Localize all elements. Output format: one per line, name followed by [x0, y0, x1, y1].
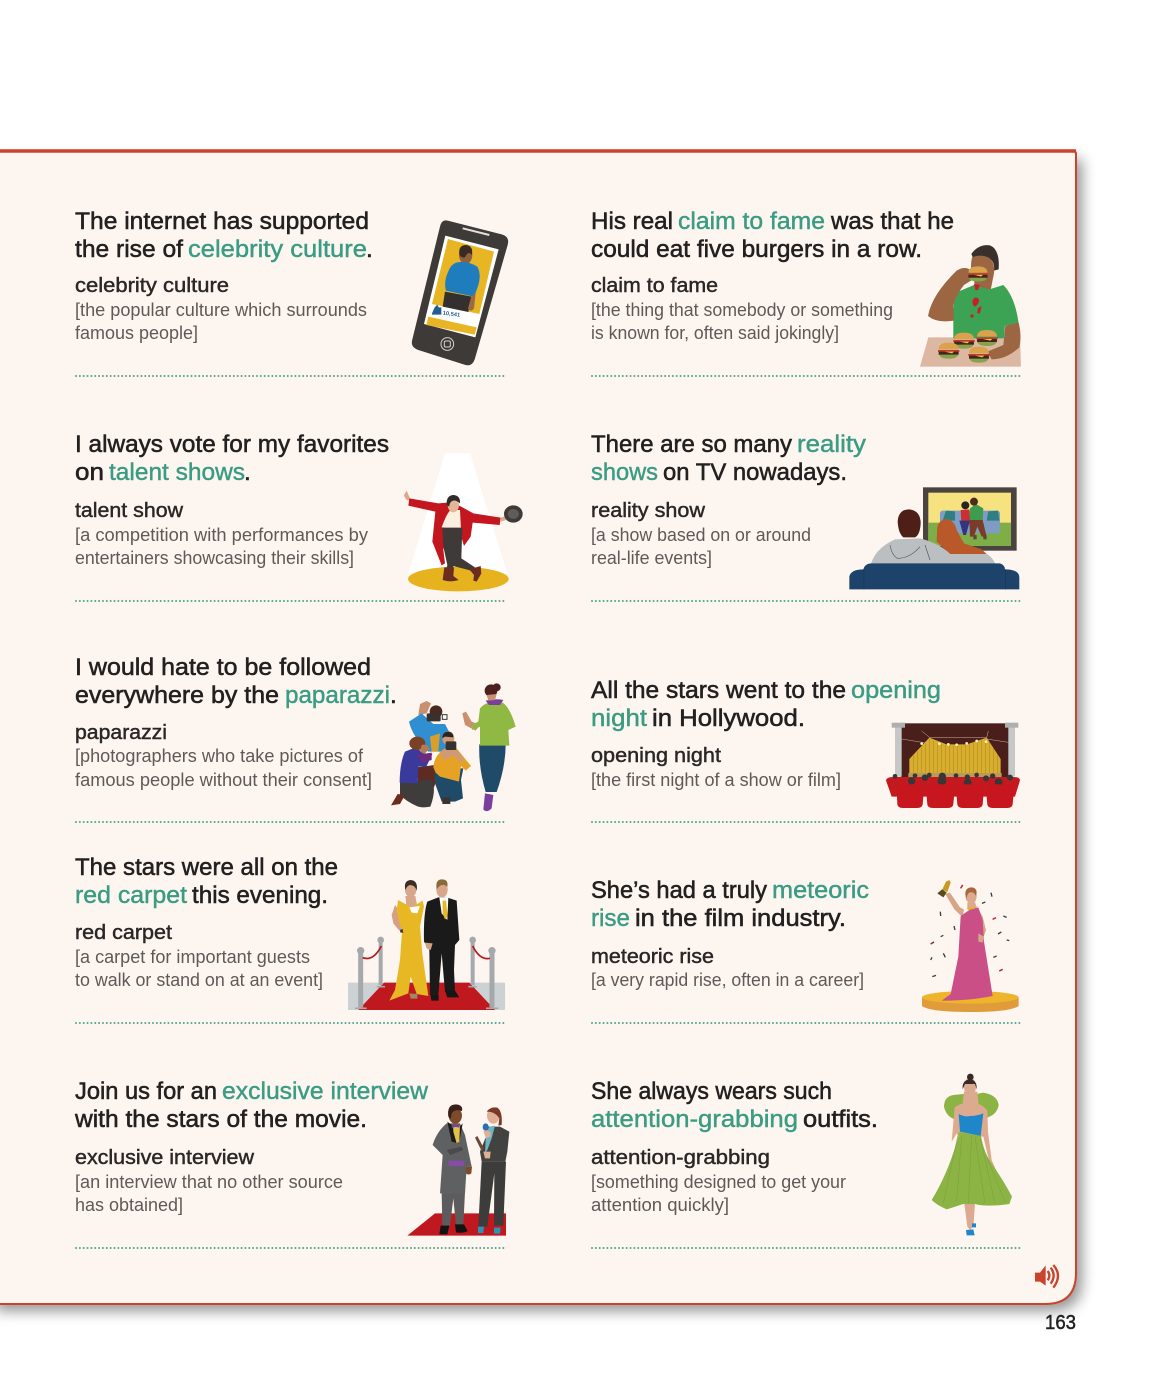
heading: on — [75, 459, 104, 486]
term: attention-grabbing — [591, 1146, 770, 1169]
definition: [the first night of a show or film] — [591, 769, 841, 790]
definition: attention quickly] — [591, 1194, 729, 1215]
heading: in the film industry. — [635, 905, 846, 932]
icon: award winner on podium — [922, 880, 1019, 1012]
definition — [591, 1171, 846, 1215]
entry: opening night — [591, 677, 1022, 822]
heading — [591, 208, 954, 263]
heading: She always wears such — [591, 1078, 832, 1105]
heading — [74, 1078, 428, 1133]
definition: [a competition with performances by — [75, 524, 369, 545]
entry: talent show — [75, 431, 523, 601]
definition — [75, 524, 369, 568]
heading — [75, 854, 338, 909]
page number: 163 — [1045, 1311, 1076, 1334]
entry: celebrity culture — [75, 208, 508, 376]
entry: paparazzi — [75, 654, 516, 822]
definition: [something designed to get your — [591, 1171, 846, 1192]
heading: meteoric — [772, 877, 869, 904]
definition: [a carpet for important guests — [75, 946, 310, 967]
term: meteoric rise — [591, 945, 714, 968]
heading: Join us for an — [75, 1078, 217, 1105]
term: opening night — [591, 744, 721, 767]
definition: famous people without their consent] — [75, 769, 372, 790]
definition: [a show based on or around — [591, 524, 811, 545]
heading: outfits. — [803, 1106, 878, 1133]
heading: was that he — [830, 208, 954, 235]
panel: vocabulary page — [0, 151, 1082, 1311]
term: exclusive interview — [75, 1146, 254, 1169]
entry: attention-grabbing — [591, 1074, 1022, 1248]
definition: to walk or stand on at an event] — [75, 969, 323, 990]
entry: claim to fame — [591, 208, 1022, 376]
definition — [75, 745, 372, 790]
icon: smartphone — [412, 220, 508, 365]
heading: opening — [851, 677, 941, 704]
heading: claim to fame — [678, 208, 825, 235]
definition: is known for, often said jokingly] — [591, 322, 839, 343]
heading: There are so many — [591, 431, 793, 458]
icon: woman in green dress — [932, 1074, 1012, 1235]
heading — [75, 431, 389, 486]
definition — [591, 524, 811, 568]
heading: I always vote for my favorites — [75, 431, 389, 458]
heading: with the stars of the movie. — [74, 1106, 367, 1133]
heading: All the stars went to the — [591, 677, 846, 704]
definition: entertainers showcasing their skills] — [75, 547, 354, 568]
icon: couple watching television — [849, 487, 1019, 589]
definition: has obtained] — [75, 1194, 183, 1215]
definition: [an interview that no other source — [75, 1171, 343, 1192]
heading: red carpet — [75, 882, 187, 909]
heading: talent shows — [109, 459, 245, 486]
icon: theatre stage with red seats — [886, 723, 1020, 808]
definition: [a very rapid rise, often in a career] — [591, 969, 864, 990]
heading: The stars were all on the — [75, 854, 338, 881]
icon: man eating burgers — [920, 245, 1021, 367]
entry: meteoric rise — [591, 877, 1022, 1023]
heading: I would hate to be followed — [75, 654, 371, 681]
heading: reality — [797, 431, 867, 458]
icon: smartphone: 10,541 — [442, 311, 460, 319]
heading: The internet has supported — [75, 208, 369, 235]
heading: paparazzi — [285, 682, 390, 709]
definition: [the popular culture which surrounds — [75, 299, 367, 320]
term: talent show — [75, 499, 183, 522]
definition: real-life events] — [591, 547, 712, 568]
term: claim to fame — [591, 274, 718, 297]
definition: [the thing that somebody or something — [591, 299, 893, 320]
heading: attention-grabbing — [591, 1106, 798, 1133]
term: reality show — [591, 499, 705, 522]
icon: interview on red carpet — [407, 1104, 509, 1236]
definition — [591, 299, 893, 343]
heading: night — [591, 705, 647, 732]
heading: could eat five burgers in a row. — [591, 236, 922, 263]
heading: . — [244, 459, 251, 486]
entry: exclusive interview — [74, 1078, 509, 1248]
heading: His real — [591, 208, 673, 235]
heading — [591, 1078, 878, 1133]
heading — [75, 654, 397, 709]
icon: couple on red carpet — [348, 879, 505, 1010]
definition: [photographers who take pictures of — [75, 745, 364, 766]
icon: paparazzi photographing a woman — [391, 683, 516, 811]
heading: . — [366, 236, 373, 263]
entry: reality show — [591, 431, 1022, 601]
heading: in Hollywood. — [652, 705, 805, 732]
icon: audio speaker — [1035, 1265, 1058, 1288]
heading: . — [390, 682, 397, 709]
heading — [591, 877, 869, 932]
heading: the rise of — [75, 236, 183, 263]
heading: exclusive interview — [222, 1078, 428, 1105]
definition — [75, 1171, 343, 1215]
heading: everywhere by the — [75, 682, 279, 709]
heading: this evening. — [192, 882, 328, 909]
heading: celebrity culture — [188, 236, 367, 263]
icon: performer in spotlight — [404, 453, 523, 591]
definition — [75, 299, 367, 343]
term: red carpet — [75, 921, 172, 944]
heading — [591, 677, 941, 732]
heading: on TV nowadays. — [663, 459, 847, 486]
term: celebrity culture — [75, 274, 229, 297]
heading — [591, 431, 867, 486]
heading: She’s had a truly — [591, 877, 768, 904]
term: paparazzi — [75, 721, 167, 744]
definition — [75, 946, 323, 990]
definition: famous people] — [75, 322, 198, 343]
heading — [75, 208, 373, 263]
heading: rise — [591, 905, 630, 932]
entry: red carpet — [75, 854, 506, 1023]
heading: shows — [591, 459, 658, 486]
